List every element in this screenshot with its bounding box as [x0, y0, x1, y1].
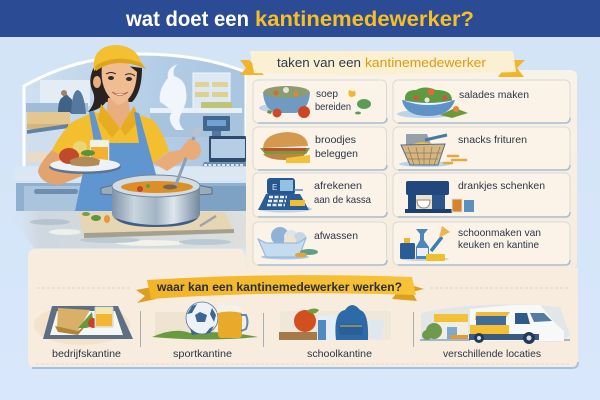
counter	[11, 166, 246, 211]
label: sportkantine: sportkantine	[173, 348, 232, 360]
label: salades maken: salades maken	[459, 89, 529, 101]
icon: football and beer mug	[152, 302, 258, 340]
icon: steam	[160, 64, 186, 130]
ribbon: tasks heading: taken van een	[277, 55, 361, 70]
divider	[263, 313, 264, 347]
workplace: bedrijfskantine	[34, 305, 133, 360]
illustration: canteen worker scene	[6, 45, 246, 248]
neck	[106, 98, 131, 128]
ribbon: workplaces heading: waar kan een kantinemedewerker werken?	[156, 280, 402, 294]
label: afrekenen aan de kassa: aan de kassa	[314, 194, 371, 206]
canteen window background	[24, 54, 246, 172]
icon: tray with sandwich	[34, 305, 133, 345]
icon: salad bowl	[397, 88, 468, 118]
label: afrekenen aan de kassa: afrekenen	[314, 180, 362, 192]
label: bedrijfskantine: bedrijfskantine	[52, 348, 121, 360]
label: broodjes beleggen	[315, 134, 358, 160]
icon: washing tub	[258, 227, 318, 260]
icon: garnish	[348, 89, 371, 114]
display shelf	[150, 73, 242, 137]
label: soep bereiden: soep	[316, 88, 338, 100]
label: schoonmaken van keuken en kantine: keuken en kantine	[458, 239, 539, 251]
icon: apple, carton and backpack	[279, 305, 391, 340]
apron	[75, 111, 166, 211]
label: soep bereiden	[315, 88, 351, 113]
icon: soup bowl	[259, 86, 310, 118]
ribbon: workplaces heading	[136, 275, 424, 303]
label: afrekenen aan de kassa	[314, 180, 371, 206]
card: soep bereiden	[253, 80, 387, 123]
divider	[413, 312, 414, 347]
label: afwassen: afwassen	[314, 230, 358, 242]
arm with ladle	[153, 138, 200, 171]
icon: cash register: E	[272, 183, 277, 192]
header banner	[0, 0, 600, 37]
card: schoonmaken van keuken en kantine	[393, 222, 570, 265]
plate with food	[49, 140, 121, 174]
workplace: verschillende locaties	[420, 305, 570, 360]
title	[125, 8, 474, 31]
icon: cleaning supplies	[400, 226, 450, 261]
label: soep bereiden: bereiden	[315, 101, 351, 113]
label: schoonmaken van keuken en kantine: schoonmaken van	[458, 227, 541, 239]
panel: tasks	[240, 51, 577, 270]
face	[102, 60, 137, 105]
ribbon: tasks heading: kantinemedewerker	[365, 55, 487, 70]
card: snacks frituren	[393, 127, 570, 170]
icon: coffee machine and drinks	[405, 181, 474, 213]
label: broodjes beleggen: beleggen	[315, 148, 358, 160]
arm holding plate	[38, 150, 82, 185]
icon: frying basket	[399, 134, 466, 167]
workplace: schoolkantine	[279, 305, 391, 360]
title: wat doet een	[125, 8, 249, 31]
label: schoonmaken van keuken en kantine	[458, 227, 541, 251]
label: drankjes schenken: drankjes schenken	[458, 180, 545, 192]
cutting board	[78, 212, 234, 238]
shirt	[52, 112, 169, 176]
label: snacks frituren: snacks frituren	[458, 134, 527, 146]
icon: sandwich	[260, 132, 310, 163]
label: verschillende locaties: verschillende locaties	[443, 348, 541, 360]
divider	[140, 311, 141, 347]
card: afrekenen aan de kassa	[253, 173, 387, 217]
worker	[38, 45, 200, 211]
cash register	[199, 116, 246, 174]
label: schoolkantine: schoolkantine	[307, 348, 372, 360]
ladle	[163, 125, 203, 190]
card: afwassen	[253, 222, 387, 265]
title: kantinemedewerker?	[255, 8, 474, 31]
card: drankjes schenken	[393, 173, 570, 217]
cap	[94, 45, 146, 71]
shirt collar	[98, 104, 140, 138]
label: broodjes beleggen: broodjes	[315, 134, 356, 146]
icon: building and catering van	[420, 305, 570, 344]
soup pot	[101, 175, 212, 227]
card: broodjes beleggen	[253, 127, 387, 170]
hair back	[88, 62, 142, 112]
ribbon: tasks heading	[240, 51, 525, 77]
workplace: sportkantine	[152, 302, 258, 360]
panel: workplaces	[28, 249, 578, 368]
marble worktop	[6, 211, 246, 248]
card: salades maken	[393, 80, 570, 123]
